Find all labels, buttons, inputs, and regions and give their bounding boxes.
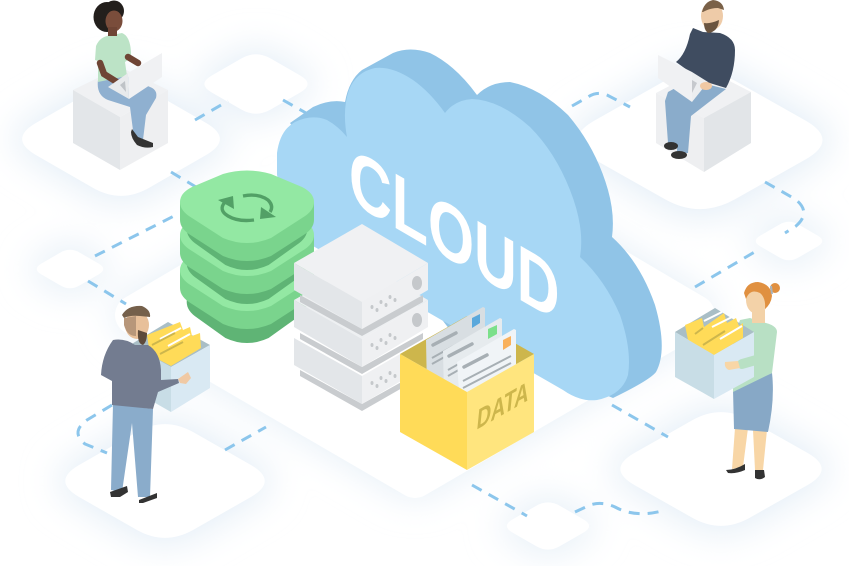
cloud side face <box>290 50 662 398</box>
person: woman carrying box <box>675 282 780 479</box>
stack layer 3 <box>180 238 314 343</box>
box front right <box>467 354 534 470</box>
sweater <box>101 340 179 409</box>
head <box>94 0 124 36</box>
document 1 <box>426 307 485 390</box>
cloud front face <box>277 68 629 400</box>
shirt <box>95 33 131 82</box>
green stack with refresh icon <box>180 170 314 343</box>
dashed connection lines <box>78 93 804 516</box>
cloud <box>277 50 662 400</box>
legs <box>111 404 153 497</box>
person: woman on cube with laptop <box>73 0 168 170</box>
cloud label: CLOUD <box>349 129 560 340</box>
legs <box>665 80 726 153</box>
skirt <box>733 373 773 432</box>
folders <box>147 322 201 366</box>
box label: DATA <box>475 374 531 437</box>
document 2 <box>443 318 502 395</box>
torso <box>733 318 777 392</box>
server stack <box>294 224 428 411</box>
storage box <box>130 322 210 412</box>
server unit 1 <box>294 224 428 336</box>
head <box>701 0 724 33</box>
shoes <box>110 486 157 503</box>
arm <box>742 332 771 364</box>
person: man carrying box <box>101 306 210 503</box>
shoes <box>664 142 687 159</box>
head <box>744 282 780 323</box>
person: man on cube with laptop <box>656 0 751 172</box>
document 3 <box>457 329 516 405</box>
cube seat <box>73 67 168 170</box>
folders <box>685 312 743 355</box>
laptop <box>658 55 712 102</box>
box interior <box>400 316 534 392</box>
laptop <box>108 53 162 99</box>
hand <box>178 372 191 384</box>
stack layer 2 <box>180 204 314 304</box>
head <box>122 306 150 345</box>
server unit 3 <box>294 338 428 411</box>
sweater <box>676 28 735 88</box>
legs <box>98 76 156 140</box>
hand <box>725 361 740 370</box>
arms <box>100 57 138 84</box>
storage box <box>675 308 754 399</box>
icon: refresh arrows <box>218 195 276 220</box>
server unit 2 <box>294 262 428 374</box>
box front left <box>400 354 467 470</box>
shoes <box>131 129 153 148</box>
legs <box>732 428 767 470</box>
data box <box>400 307 534 470</box>
stack layer 1 <box>180 170 314 270</box>
cube seat <box>656 68 751 172</box>
shoes <box>726 464 765 479</box>
